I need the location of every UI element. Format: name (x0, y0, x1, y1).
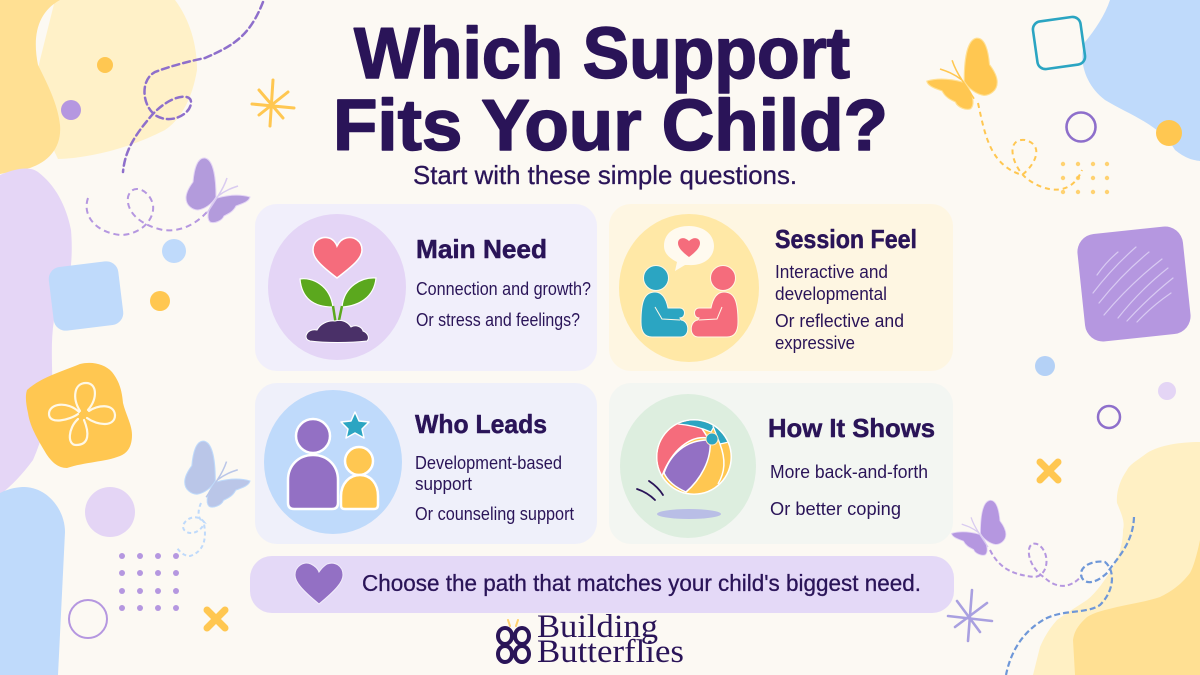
text block: Or better coping (770, 499, 901, 519)
callout banner (250, 556, 954, 613)
flower badge (26, 363, 132, 468)
dashed trail lavender (87, 189, 207, 235)
callout text: Choose the path that matches your child's biggest need. (362, 570, 921, 596)
butterfly yellow (927, 38, 997, 109)
purple scribble square (1076, 225, 1192, 343)
butterfly purple (186, 158, 250, 223)
logo: Building Butterflies (498, 609, 684, 670)
heading: Who Leads (415, 409, 547, 439)
logo: Building Butterflies: Butterflies (537, 634, 684, 670)
heading: How It Shows (768, 413, 935, 443)
starburst yellow (252, 80, 294, 126)
subtitle: Start with these simple questions. (413, 160, 797, 190)
icon: seedling with heart (268, 214, 406, 360)
text block (770, 462, 928, 519)
dashed trail blue right (1006, 517, 1134, 675)
butterfly lavender (952, 500, 1006, 555)
text block: developmental (775, 284, 887, 304)
dashed trail blue (177, 503, 205, 556)
panel: main need (255, 204, 597, 371)
panel: how it shows (609, 383, 953, 544)
text block: Development-based (415, 453, 562, 473)
title: Which Support (354, 14, 850, 94)
text block: Or stress and feelings? (416, 310, 580, 330)
dashed trail purple (123, 2, 263, 172)
text block (775, 262, 904, 353)
text block: Interactive and (775, 262, 888, 282)
title: Fits Your Child? (333, 86, 888, 166)
panel: who leads (255, 383, 597, 544)
starburst purple (948, 590, 992, 641)
dashed trail lavender right (990, 544, 1082, 586)
text block: support (415, 474, 472, 494)
butterfly blue (185, 441, 250, 507)
panel: session feel (609, 204, 953, 371)
text block: Or counseling support (415, 504, 574, 524)
icon: adult and child with star (264, 390, 402, 534)
text block (416, 279, 591, 330)
heading: Session Feel (775, 224, 917, 254)
text block: expressive (775, 333, 855, 353)
icon: two people talking (619, 214, 759, 362)
dashed trail yellow (978, 103, 1082, 190)
text block: Or reflective and (775, 311, 904, 331)
icon: bouncing beach ball (620, 394, 756, 538)
icon: heart (295, 563, 343, 604)
decorative shapes left (47, 57, 225, 638)
text block: Connection and growth? (416, 279, 591, 299)
heading: Main Need (416, 234, 547, 264)
logo: Building Butterflies: Building (537, 609, 658, 645)
text block: More back-and-forth (770, 462, 928, 482)
decorative shapes right (1032, 16, 1182, 480)
title (333, 14, 888, 166)
text block (415, 453, 574, 524)
